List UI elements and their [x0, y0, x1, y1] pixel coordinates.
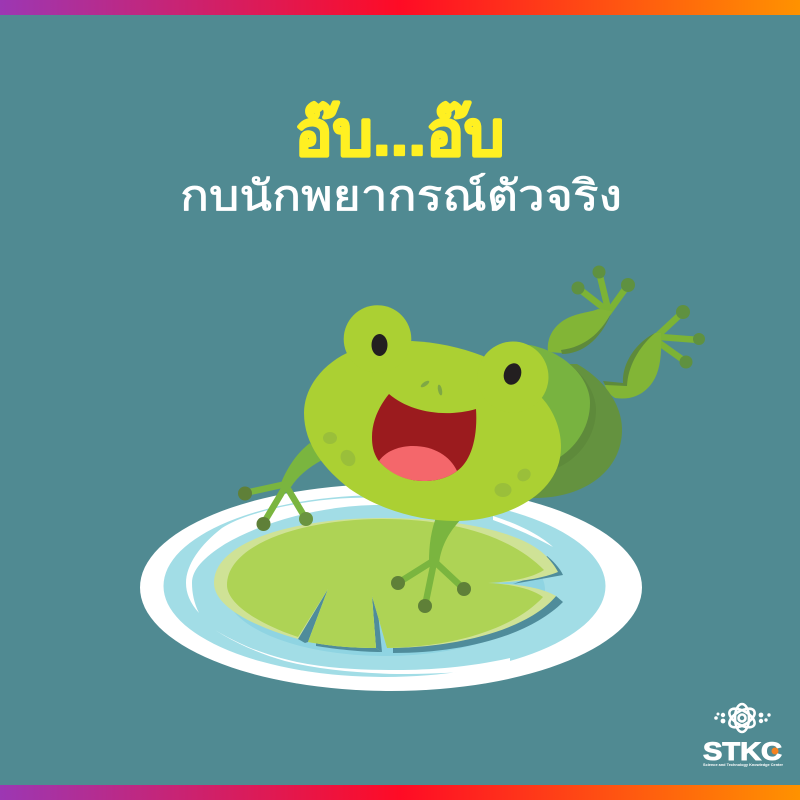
front leg: bottom [391, 515, 471, 613]
calf [604, 333, 661, 399]
title: อ๊บ...อ๊บ [294, 100, 504, 169]
STKC logo [703, 704, 783, 767]
lily pad water tint [225, 524, 545, 656]
white ripple: upper right [493, 516, 553, 547]
nostrils [420, 379, 443, 396]
white ripple: upper left [186, 498, 420, 613]
subtitle: กบนักพยากรณ์ตัวจริง [180, 172, 622, 219]
frog [238, 266, 705, 613]
right eye [501, 361, 524, 387]
toe tips [676, 305, 690, 319]
back leg: lower [603, 305, 705, 399]
right eye bump [478, 342, 548, 412]
thigh shadow [561, 314, 611, 354]
lily pad surface [227, 519, 544, 648]
toe tips [391, 576, 405, 590]
front leg: left [238, 443, 322, 531]
top gradient bar [0, 0, 800, 15]
toes [578, 272, 628, 313]
cheek spots [323, 432, 533, 497]
toes [655, 312, 699, 362]
lily pad rim [214, 518, 558, 648]
body shading [500, 345, 596, 468]
tagline: Science and Technology Knowledge Center [703, 762, 783, 767]
bottom gradient bar [0, 785, 800, 800]
illustration: pond and lily pad [140, 484, 642, 691]
body back [490, 364, 622, 498]
toe tips [238, 486, 252, 500]
white ripple: lower [215, 630, 510, 674]
white water splash [140, 484, 642, 691]
orange dot [772, 748, 778, 754]
tongue [379, 446, 457, 481]
toe tips [572, 282, 584, 294]
left eye bump [344, 305, 411, 373]
lily pad shadow [298, 556, 563, 653]
mouth [372, 394, 476, 481]
STKC wordmark: STKC [703, 738, 782, 766]
back leg: upper [548, 266, 635, 354]
calf shadow [603, 333, 655, 386]
blue water [164, 495, 606, 677]
thigh [548, 309, 612, 353]
head [304, 305, 561, 521]
body light [500, 345, 590, 457]
left eye [372, 334, 388, 356]
dots [714, 712, 771, 723]
atom icon [726, 704, 758, 732]
